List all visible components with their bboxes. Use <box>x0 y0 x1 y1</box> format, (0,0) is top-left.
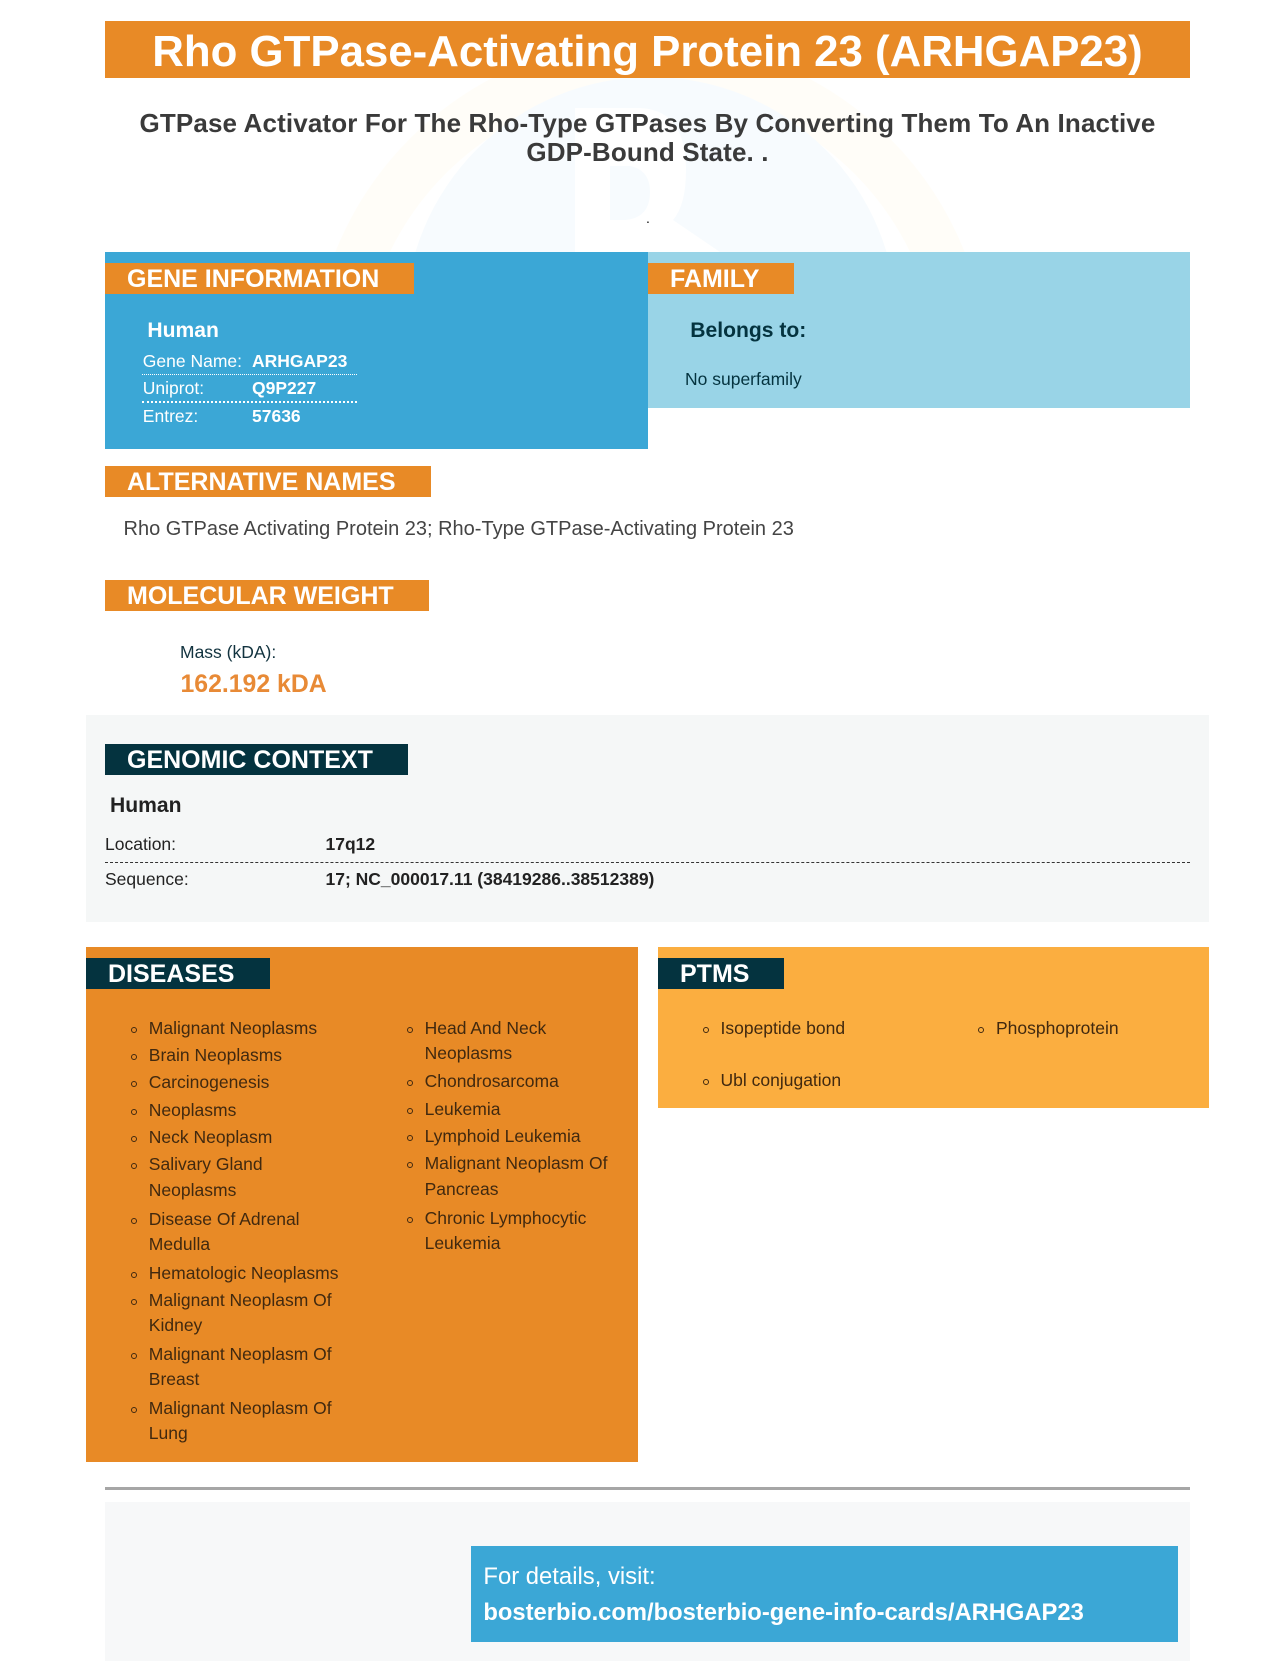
title banner: Rho GTPase-Activating Protein 23 (ARHGAP23) <box>152 27 1143 76</box>
section: molecular weight <box>105 580 429 698</box>
sequence row: 17; NC_000017.11 (38419286..38512389) <box>326 869 654 889</box>
entrez row <box>143 406 301 426</box>
uniprot row: Uniprot: <box>143 378 204 398</box>
diseases list: Disease Of Adrenal <box>149 1209 300 1229</box>
heading: PTMs <box>658 958 784 989</box>
mass value: 162.192 kDA <box>180 670 327 698</box>
PTMs list: Isopeptide bond <box>720 1018 845 1038</box>
location row <box>105 828 1190 863</box>
diseases list: Malignant Neoplasms <box>149 1018 317 1038</box>
species label: Human <box>147 319 219 342</box>
diseases list: Hematologic Neoplasms <box>149 1263 338 1283</box>
footer rule <box>105 1487 1190 1490</box>
diseases list: Lung <box>149 1423 188 1443</box>
diseases list: Carcinogenesis <box>149 1072 269 1092</box>
diseases list: Leukemia <box>425 1233 500 1253</box>
PTMs list <box>703 1018 1119 1090</box>
diseases list: Medulla <box>149 1234 210 1254</box>
gene name row: ARHGAP23 <box>252 351 347 371</box>
diseases list: Kidney <box>149 1315 202 1335</box>
heading: diseases: DISEASES <box>108 960 234 988</box>
mass label: Mass (kDA): <box>180 642 276 662</box>
entrez row: 57636 <box>252 406 301 426</box>
diseases list: Neoplasms <box>149 1180 236 1200</box>
panel: genomic context <box>86 715 1209 922</box>
heading: genomic context: GENOMIC CONTEXT <box>127 746 373 774</box>
panel: gene information <box>105 252 648 449</box>
entrez row: Entrez: <box>143 406 198 426</box>
PTMs list: Phosphoprotein <box>996 1018 1119 1038</box>
alternative names text: Rho GTPase Activating Protein 23; Rho-Type GTPase-Activating Protein 23 <box>124 518 794 540</box>
species label: Human <box>110 794 182 817</box>
diseases list: Leukemia <box>425 1099 500 1119</box>
uniprot row: Q9P227 <box>252 378 316 398</box>
diseases list: Breast <box>149 1369 199 1389</box>
heading: alternative names: ALTERNATIVE NAMES <box>127 468 396 496</box>
diseases list: Neoplasms <box>149 1100 236 1120</box>
panel: family <box>648 252 1190 408</box>
diseases list: Salivary Gland <box>149 1154 263 1174</box>
background watermark logo <box>0 0 1288 252</box>
details URL: bosterbio.com/bosterbio-gene-info-cards/ARHGAP23 <box>483 1599 1084 1626</box>
diseases list: Malignant Neoplasm Of <box>425 1153 607 1173</box>
diseases list: Neck Neoplasm <box>149 1127 272 1147</box>
PTMs list: Ubl conjugation <box>720 1070 841 1090</box>
belongs to label: Belongs to: <box>690 319 806 342</box>
diseases list: Head And Neck <box>425 1018 546 1038</box>
panel: footer <box>105 1502 1190 1661</box>
diseases list: Chondrosarcoma <box>425 1071 559 1091</box>
diseases list: Malignant Neoplasm Of <box>149 1344 332 1364</box>
sequence row: Sequence: <box>105 869 189 889</box>
diseases list: Malignant Neoplasm Of <box>149 1290 332 1310</box>
diseases list: Brain Neoplasms <box>149 1045 282 1065</box>
heading: family <box>648 263 794 294</box>
diseases list: Malignant Neoplasm Of <box>149 1398 332 1418</box>
location row: Location: <box>105 834 176 854</box>
panel: PTMs <box>658 947 1209 1108</box>
gene name row <box>142 346 357 374</box>
section: alternative names <box>105 466 794 540</box>
callout: details link <box>471 1546 1178 1642</box>
panel: diseases <box>86 947 638 1462</box>
subtitle description: GDP-Bound State. . <box>526 137 769 167</box>
diseases list: Pancreas <box>425 1179 499 1199</box>
sequence row <box>105 869 654 889</box>
diseases list: Neoplasms <box>425 1043 512 1063</box>
heading: diseases <box>86 958 270 989</box>
subtitle description <box>139 108 1156 167</box>
diseases list: Chronic Lymphocytic <box>425 1208 586 1228</box>
superfamily value: No superfamily <box>685 369 802 389</box>
diseases list <box>131 1018 608 1443</box>
uniprot row <box>142 374 357 403</box>
heading: molecular weight: MOLECULAR WEIGHT <box>127 582 394 610</box>
heading: gene information: GENE INFORMATION <box>127 265 379 293</box>
gene name row: Gene Name: <box>143 351 242 371</box>
small dot text: . <box>646 210 650 226</box>
heading: PTMs: PTMS <box>680 960 749 988</box>
subtitle description: GTPase Activator For The Rho-Type GTPases By Converting Them To An Inactive <box>139 108 1156 138</box>
diseases list: Lymphoid Leukemia <box>425 1126 581 1146</box>
location row: 17q12 <box>326 834 375 854</box>
heading: family: FAMILY <box>670 265 759 293</box>
details prompt: For details, visit: <box>483 1563 656 1590</box>
